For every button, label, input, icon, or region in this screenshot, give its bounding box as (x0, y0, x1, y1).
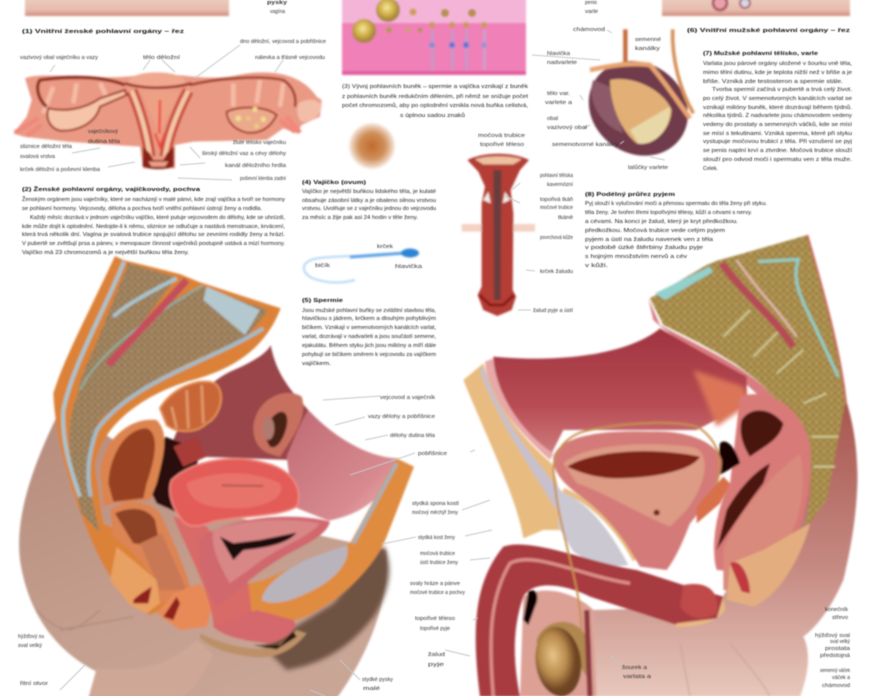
labels: penis section: pohlavní tělíska (540, 173, 573, 179)
illustration: sperm cell (304, 248, 419, 282)
labels: uterus diagram: dutina těla (88, 139, 120, 145)
leader lines (50, 30, 665, 696)
labels: centre between pelvis sections: ústí trubice ženy (420, 560, 458, 566)
cervix (143, 147, 174, 169)
caption: follicles: z pohlavních buněk redukčním dělením, při němž se snižuje počet (342, 94, 528, 100)
labels: penis section (478, 133, 574, 314)
text block: male organs: břiše. Vzniká zde testosteron a spermie stále. (703, 79, 844, 85)
labels: sperm: krček (377, 244, 394, 250)
labels: uterus diagram: poševní klenba zadní (240, 176, 287, 182)
labels: female section (18, 634, 393, 692)
text block: sperm: bičíkem. Vznikají v semenotvorných kanálcích varlat, (302, 325, 436, 331)
illustration: female pelvis sagittal section (19, 256, 414, 696)
testis outer (570, 42, 706, 175)
body skin (19, 407, 387, 696)
labels: centre between pelvis sections: vejcovod a vaječník (380, 395, 435, 401)
text block: male organs: Varlata jsou párové orgány uložené v šourku vně těla, (703, 61, 852, 67)
labels: uterus diagram: tělo děložní (143, 55, 181, 61)
text block: female organs: Ženským orgánem jsou vaječníky, které se nacházejí v malé pánvi, kde zrají vajíčka a tvoří se hormony (22, 195, 285, 203)
text block: egg cell (302, 180, 436, 221)
pubic bone grey (262, 545, 348, 603)
icon: large follicle left (352, 19, 376, 43)
labels: centre between pelvis sections: močové trubice a pochvy (410, 590, 465, 596)
text block: male organs (703, 51, 853, 172)
labels: male section: předstojná (820, 653, 850, 659)
text block: female organs: (2) Ženské pohlavní orgány, vajíčkovody, pochva (22, 185, 201, 193)
text block: penis: s hojným množstvím nervů a cév (585, 253, 687, 260)
caption: follicles: s úplnou sadou znaků (400, 112, 465, 119)
text block: male organs: vystupuje močovou trubicí z těla. Při vzrušení se pyj (703, 139, 852, 145)
labels: uterus diagram: kanál děložního hrdla (225, 163, 286, 169)
peritoneum anterior wall (287, 410, 397, 521)
caption: follicles: počet chromozomů, aby po oplodnění vznikla nová buňka celistvá, (342, 102, 528, 109)
text block: egg cell: Vajíčko je největší buňkou lidského těla, je kulaté (302, 189, 436, 195)
labels: centre between pelvis sections (368, 395, 465, 668)
body skin (593, 397, 857, 696)
spermatic cords (619, 29, 632, 63)
panel: top left skin strip (25, 0, 229, 16)
labels: male section: hýžďový sval (815, 633, 850, 639)
labels: centre between pelvis sections: dělohy dutina těla (390, 433, 435, 439)
labels: female section: řitní otvor (20, 681, 48, 687)
text block: male organs: Celek. (703, 166, 718, 172)
labels: centre between pelvis sections: pobřišnice (418, 451, 447, 457)
bladder (553, 431, 722, 570)
text block: male organs: se penis naplní krví a ztvrdne. Močová trubice slouží (703, 148, 853, 154)
caption: follicles (342, 84, 528, 119)
labels: sperm: bičík (315, 263, 331, 269)
text block: female organs: která trvá několik dní. Vagína je svalová trubice spojující dělohu se zevními rodidly ženy a hrází. (22, 232, 285, 238)
text block: penis: v kůži. (585, 262, 609, 269)
labels: uterus diagram: dno děložní, vejcovod a pobřišnice (240, 39, 326, 45)
labels: uterus diagram: pysky (267, 0, 287, 6)
broad ligament (13, 72, 322, 168)
labels: female section: sval velký (18, 643, 42, 649)
labels: uterus diagram: sliznice děložní těla (20, 144, 72, 150)
illustration: uterus and ovaries front view (13, 72, 322, 169)
top tube bar (125, 83, 192, 88)
text block: egg cell: vrstvou. Uvolňuje se z vaječníku jednou do vejcovodu (302, 206, 436, 212)
testis (531, 610, 590, 696)
vagina and lower pelvic tissue (173, 517, 257, 627)
text block: penis: Pyj slouží k vylučování moči a přenosu spermatu do těla ženy při styku. (585, 201, 767, 207)
bladder lumen (220, 533, 297, 560)
spine olive brown (650, 235, 845, 530)
text block: sperm (302, 298, 436, 367)
labels: testis: varle (585, 9, 598, 15)
labels: penis section: močová trubice (478, 133, 525, 139)
right edge (807, 235, 846, 403)
caption: male organs: (6) Vnitřní mužské pohlavní orgány – řez (687, 28, 850, 34)
labels: penis section: topořivé těleso (480, 142, 524, 148)
illustration: male pelvis sagittal section (463, 235, 857, 696)
text block: penis: předkožkou. Močová trubice vede celým pyjem (585, 228, 725, 234)
labels: centre between pelvis sections: topořivé těleso (415, 616, 455, 622)
ovary right with follicles (227, 107, 277, 133)
caption: follicles: (3) Vývoj pohlavních buněk – spermie a vajíčka vznikají z buněk (342, 84, 528, 90)
rectum upper (100, 420, 164, 507)
labels: uterus diagram: nálevka a třásně vejcovodu (255, 55, 325, 61)
icon: large follicle top (376, 0, 400, 22)
labels: male section: varlata a (623, 674, 651, 680)
labels: testis: chámovod (573, 27, 605, 33)
uterine fundus (128, 72, 185, 91)
labels: testis: semenotvorné kanálky (552, 142, 619, 148)
text block: male organs: vedeny do prostaty a semenných váčků, kde se mísí (703, 121, 853, 128)
labels: testis: kanálky (635, 46, 661, 52)
text block: penis: a cévami. Na konci je žalud, který je kryt předkožkou. (585, 219, 739, 225)
cell rows (386, 8, 487, 70)
pubic bone grey (558, 490, 628, 568)
labels: male section (622, 607, 850, 689)
posterior rectum wall pink (714, 394, 811, 573)
labels: centre between pelvis sections: svaly hráze a pánve (410, 581, 460, 587)
cyan strip right (758, 259, 838, 377)
labels: male section: chámovod (822, 683, 850, 689)
text block: sperm: ejakulátu. Během styku jich jsou milióny a míří dále (302, 343, 436, 349)
uterine arms (132, 91, 188, 157)
text block: sperm: hlavičkou s jádrem, krčkem a dlouhým pohyblivým (302, 316, 436, 322)
labels: penis section: krček žaludu (540, 269, 573, 275)
labels: male section: sval velký (830, 639, 850, 645)
text block: male organs: slouží pro odvod moči i spermatu ven z těla muže. (703, 157, 853, 163)
perineum tissue (213, 610, 295, 643)
seminal vesicle (697, 477, 730, 523)
labels: testis: hlavička (547, 51, 570, 57)
labia (200, 630, 307, 657)
illustration: egg cell (348, 122, 396, 170)
rectum lumen dark (741, 410, 783, 457)
lower abdominal skin shadow (88, 640, 213, 696)
text block: penis: těla ženy. Je tvořen třemi topořivými tělesy, kůží a cévami s nervy. (585, 209, 752, 216)
text block: sperm: varlat, dozrávají v nadvarleti a jsou součástí semene, (302, 334, 436, 340)
labels: testis: penis (585, 0, 597, 6)
anterior wall orange band (248, 458, 414, 623)
labels: testis: tělo var. (547, 91, 570, 97)
cyan strip left (655, 267, 713, 300)
labels: centre between pelvis sections: stydká spona kostí (412, 501, 460, 507)
labels: centre between pelvis sections: močový měchýř ženy (412, 510, 458, 516)
labels: testis: varlete a (545, 100, 572, 106)
illustration: penis longitudinal section (462, 154, 535, 316)
text block: egg cell: za měsíc a žije pak asi 24 hodin v těle ženy. (302, 215, 418, 221)
anterior abdominal wall tan (463, 363, 570, 538)
labels: testis: nadvarlete (547, 60, 577, 66)
labels: uterus diagram: vazivový obal vaječníku a vazy (20, 55, 98, 61)
uterus (170, 459, 299, 526)
labels: centre between pelvis sections: močová trubice (420, 551, 455, 557)
scrotal tissue (520, 590, 597, 696)
penis shaft (476, 544, 725, 696)
pubic hair (263, 545, 389, 670)
labels: male section: prostata (825, 646, 850, 652)
rectum tissue (717, 463, 770, 550)
illustration: testis section (570, 29, 706, 175)
labels: centre between pelvis sections: topořivé pyje (420, 626, 450, 632)
penile slit (523, 590, 537, 625)
labels: female section: stydké pysky (362, 677, 393, 683)
epididymis (590, 64, 690, 118)
labels: penis section: močové trubice (540, 205, 573, 211)
labels: male section: střevo (832, 615, 848, 621)
text block: penis: (8) Podélný průřez pyjem (585, 191, 675, 198)
labels: testis: semenné (635, 37, 661, 43)
text block: female organs: Každý měsíc dozrává v jednom vaječníku vajíčko, které putuje vejcovodem do dělohy, kde se uhnízdí, (30, 215, 285, 221)
vas deferens (553, 423, 720, 630)
text block: male organs: se mísí s tekutinami. Vzniká sperma, které při styku (703, 131, 852, 137)
rectal fold highlight (693, 370, 750, 427)
labels: uterus diagram: široký děložní vaz a cévy dělohy (202, 151, 286, 157)
labels: sperm (315, 244, 422, 270)
blue stripes (63, 262, 124, 497)
labels: testis: lalůčky varlete (628, 164, 668, 171)
labels: uterus diagram: svalová vrstva (20, 154, 55, 160)
labels: uterus diagram: krček děložní a poševní klenba (20, 167, 100, 173)
fallopian tube right (190, 78, 295, 107)
labels: uterus diagram (20, 0, 326, 182)
text block: male organs: Tvorba spermií začíná v pubertě a trvá celý život. (712, 87, 853, 93)
labels: centre between pelvis sections: stydká kost ženy (418, 535, 455, 541)
labels: male section: konečník (825, 607, 848, 613)
text block: egg cell: obsahuje zásobní látky a je obaleno silnou vrstvou (302, 198, 436, 204)
black gap (150, 437, 200, 517)
labels: uterus diagram: vagína (270, 9, 285, 15)
labels: penis section: žalud pyje a ústí (533, 308, 574, 314)
text block: male organs: (7) Mužské pohlavní tělísko, varle (703, 51, 818, 57)
ovary left (47, 90, 127, 131)
text block: penis (585, 191, 767, 269)
bladder lumen (567, 451, 700, 478)
testis cut surface (610, 79, 672, 144)
rectum lower (110, 502, 193, 613)
text block: female organs: kde může dojít k oplodnění. Nedojde-li k němu, sliznice se odlučuje a nastává menstruace, krvácení, (22, 223, 285, 230)
anal canal (157, 583, 213, 630)
bladder (199, 517, 330, 607)
labels: testis (545, 0, 668, 171)
anal canal (730, 562, 750, 593)
text block: egg cell: (4) Vajíčko (ovum) (302, 180, 366, 186)
ligament ends (15, 117, 300, 136)
text block: sperm: vajíčkem. (302, 361, 332, 367)
fallopian tube left (38, 77, 125, 107)
labels: centre between pelvis sections: pyje (428, 662, 444, 668)
vertebral column brown upper (77, 263, 177, 417)
text block: penis: pyjem a ústí na žaludu navenek ven z těla (585, 237, 714, 243)
text block: sperm: Jsou mužské pohlavní buňky se zvláštní stavbou těla, (302, 308, 436, 314)
labels: male section: semenný váček (820, 668, 850, 674)
labels: sperm: hlavička (395, 264, 422, 270)
back wall orange (53, 256, 281, 615)
labels: testis: obal (547, 116, 558, 122)
fimbriae right (297, 100, 322, 122)
labels: penis section: tkáně (558, 215, 573, 221)
labels: uterus diagram: žluté tělísko vaječníku (233, 140, 286, 146)
labels: penis section: kavernózní (547, 182, 574, 188)
text block: male organs: mimo tělní dutinu, kde je teplota nižší než v břiše a je (703, 70, 852, 76)
text block: sperm: (5) Spermie (302, 298, 343, 304)
vertebral divisions (723, 310, 838, 467)
labels: penis section: topořivá tkáň (540, 197, 573, 203)
text block: female organs (22, 185, 285, 256)
peritoneal wall band (648, 298, 809, 500)
labels: penis section: povrchová kůže (540, 234, 573, 241)
text block: sperm: pohybují se bičíkem směrem k vejcovodu za vajíčkem (302, 352, 436, 358)
text block: penis: v podobě úzké štěrbiny žaludu pyje (585, 245, 703, 251)
abdominal cavity (493, 328, 747, 457)
text block: male organs: po celý život. V semenotvorných kanálcích varlat se (703, 96, 852, 102)
labels: female section: hýžďový sv. (18, 634, 45, 640)
vertebral column brown lower (69, 286, 268, 533)
ovary and fimbriae (253, 393, 303, 457)
diagram: follicle maturation (342, 0, 526, 75)
panel: top right skin strip (662, 0, 850, 16)
labels: uterus diagram: vaječníkový (88, 129, 118, 135)
small bowel (160, 382, 221, 431)
bone tan edge (563, 490, 635, 560)
tan gluteal block (727, 523, 810, 607)
red band (108, 280, 187, 365)
text block: male organs: vznikají milióny buněk, které dozrávají během týdnů. (703, 104, 853, 111)
abdominal cavity (173, 345, 308, 460)
text block: male organs: několika týdnů. Z nadvarlete jsou chámovodem vedeny (703, 112, 852, 119)
labels: male section: šourek a (622, 665, 647, 671)
text block: female organs: Vajíčko má 23 chromozomů a je největší buňkou těla ženy. (22, 249, 190, 256)
labels: female section: malé (363, 686, 380, 692)
labels: centre between pelvis sections: vazy dělohy a pobřišnice (368, 414, 435, 420)
labels: centre between pelvis sections: žalud (428, 652, 445, 658)
text block: female organs: V pubertě se zvětšují prsa a pánev, v menopauze činnost vaječníků postupně ustává a mizí hormony. (22, 240, 285, 247)
sacral red bands (722, 263, 793, 347)
text block: female organs: se pohlavní hormony. Vejcovody, děloha a pochva tvoří vnitřní pohlavní ústrojí ženy a rodidla. (22, 206, 262, 212)
labels: testis: vazivový obal (547, 125, 587, 131)
caption: internal female organs: (1) Vnitřní ženské pohlavní orgány – řez (22, 29, 184, 35)
labels: male section: váček a (832, 675, 850, 681)
rectal striated wall (723, 453, 803, 593)
